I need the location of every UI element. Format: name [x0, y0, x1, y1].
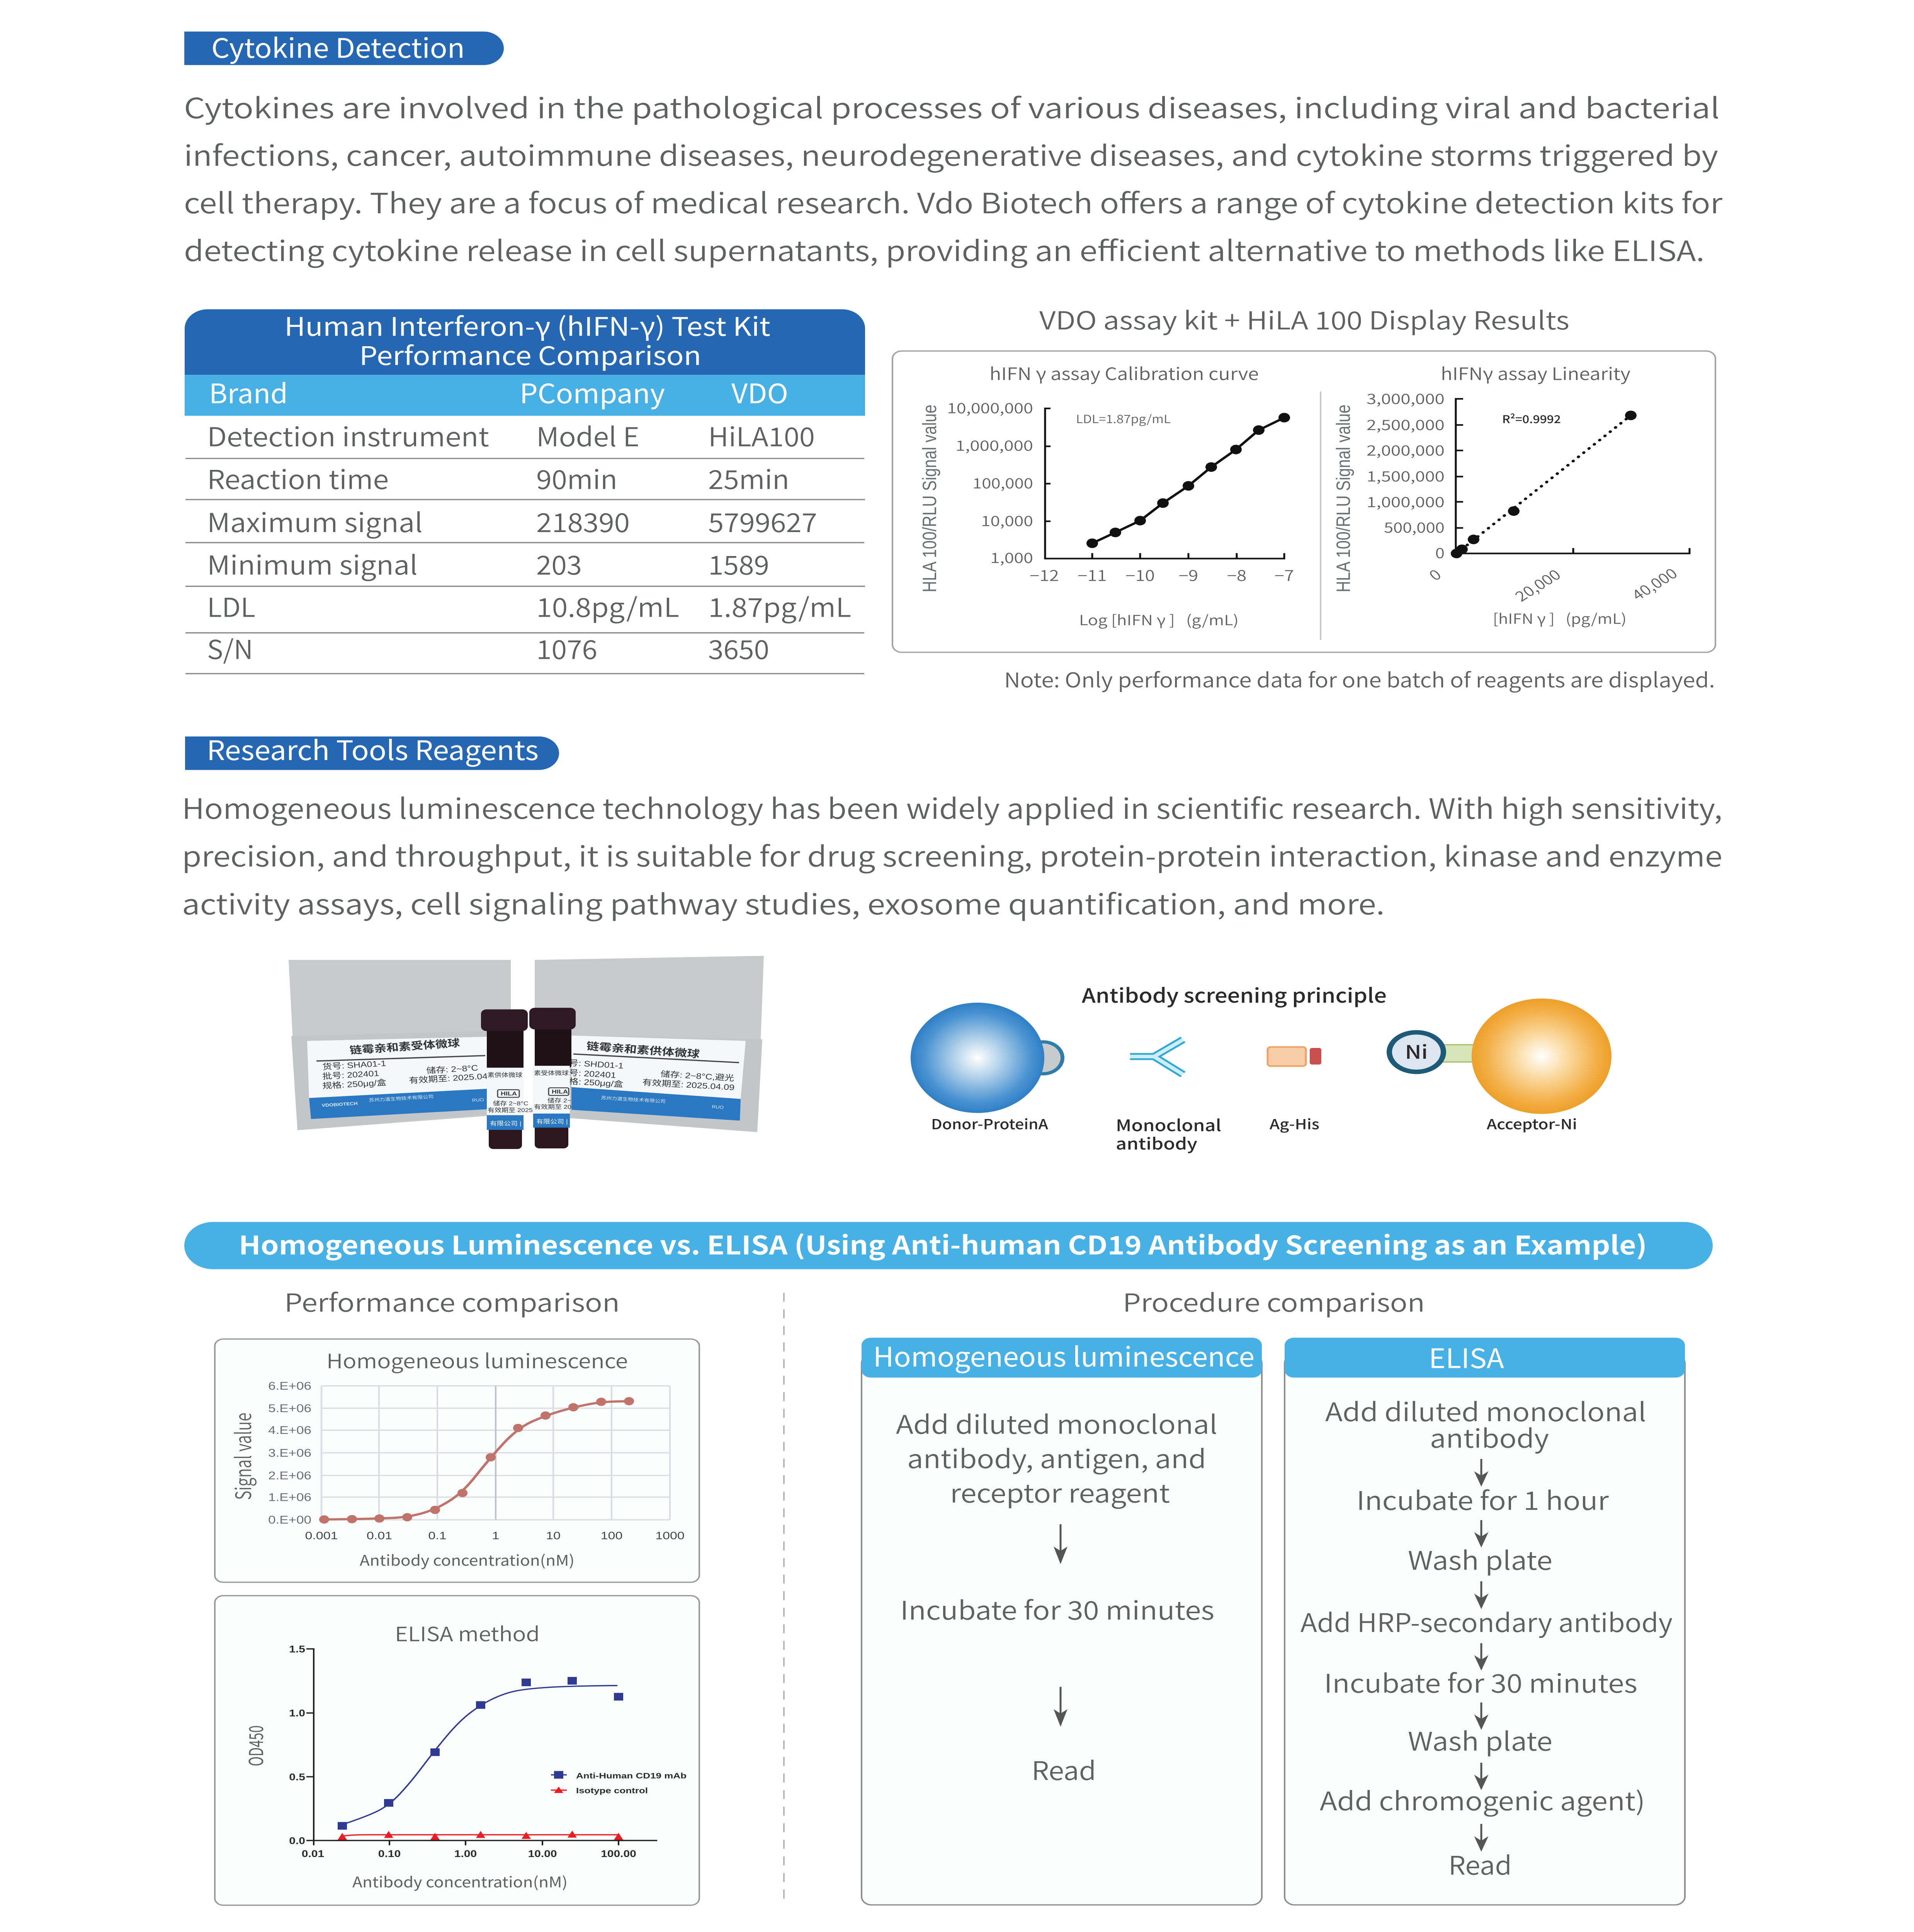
- panel: homogeneous luminescence procedure: [862, 1336, 1262, 1905]
- badge: Research Tools Reagents: Research Tools Reagents: [207, 730, 539, 768]
- panel: homogeneous luminescence chart: 0.1: [428, 1529, 447, 1542]
- icon: monoclonal antibody: [1116, 1040, 1221, 1155]
- panel: homogeneous luminescence chart: Antibody concentration(nM): [360, 1549, 575, 1570]
- chart: linearity: HLA 100/RLU Signal value: [1333, 405, 1354, 592]
- procedure steps: Incubate for 30 minutes: [900, 1590, 1214, 1627]
- chart: calibration curve: −7: [1275, 564, 1294, 585]
- panel: ELISA method chart: OD450: [241, 1725, 269, 1766]
- panel: homogeneous luminescence chart: 0.01: [367, 1529, 392, 1542]
- panel: ELISA method chart: Antibody concentration(nM): [352, 1871, 568, 1892]
- kit box left: 苏州力道生物技术有限公司: [369, 1094, 434, 1103]
- diagram title: Antibody screening principle: [1082, 980, 1387, 1009]
- procedure steps: antibody: [1430, 1418, 1549, 1456]
- procedure header: [1285, 1337, 1685, 1378]
- table column header: Brand: [209, 373, 288, 411]
- panel: homogeneous luminescence chart: 3.E+06: [268, 1447, 311, 1459]
- table body rows: 1589: [708, 544, 769, 582]
- kit box right: 有效期至: 2025.04.09: [642, 1078, 735, 1092]
- chart: calibration curve: −8: [1227, 564, 1246, 585]
- panel: homogeneous luminescence chart: 5.E+06: [268, 1402, 311, 1415]
- kit box right: RUO: [712, 1104, 724, 1110]
- table body rows: 3650: [708, 629, 769, 667]
- paragraph: homogeneous luminescence introduction: Homogeneous luminescence technology has been widely applied in scientific research. With high sensitivity,: [182, 786, 1722, 827]
- banner: homogeneous luminescence vs ELISA: Homogeneous Luminescence vs. ELISA (Using Anti-human CD19 Antibody Screening as an Example): [239, 1225, 1647, 1262]
- chart: linearity: [hIFN γ ] (pg/mL): [1493, 607, 1627, 628]
- kit box right: [535, 956, 764, 1132]
- vial left: HILA: [501, 1090, 517, 1097]
- icon: donor bead with protein A: [911, 1003, 1062, 1133]
- chart: calibration curve: 1,000,000: [955, 434, 1033, 455]
- section: research tools reagents: [182, 730, 1722, 923]
- chart: calibration curve: −11: [1078, 564, 1107, 585]
- note: reagent batch: Note: Only performance data for one batch of reagents are displayed.: [1004, 664, 1715, 693]
- kit box left: 货号: SHA01-1: [322, 1059, 386, 1071]
- chart: linearity: 1,000,000: [1367, 491, 1445, 512]
- heading: procedure comparison: Procedure comparison: [1123, 1283, 1425, 1319]
- panel: assay charts: [892, 351, 1715, 652]
- panel: homogeneous luminescence chart: 6.E+06: [268, 1379, 311, 1392]
- vial right: HILA: [552, 1088, 568, 1095]
- vial right: 有限公司 | 广: [536, 1118, 577, 1125]
- procedure steps: Incubate for 30 minutes: [1324, 1663, 1637, 1700]
- chart: calibration curve: 100,000: [972, 472, 1033, 493]
- chart: calibration curve: LDL=1.87pg/mL: [1076, 410, 1171, 427]
- kit box left: 储存: 2~8°C: [426, 1063, 478, 1075]
- panel: ELISA method chart: 0.0: [289, 1835, 305, 1846]
- kit box left: 链霉亲和素受体微球: [349, 1037, 461, 1056]
- procedure steps: [896, 1405, 1217, 1787]
- panel: homogeneous luminescence chart: Homogeneous luminescence: [326, 1346, 628, 1374]
- panel: ELISA procedure: [1285, 1337, 1685, 1905]
- panel: ELISA method chart: ELISA method: [395, 1619, 540, 1647]
- chart: linearity: 0: [1423, 564, 1446, 585]
- procedure steps: Read: [1448, 1845, 1512, 1882]
- chart: calibration curve: [919, 361, 1294, 629]
- table column header: PCompany: [520, 373, 665, 411]
- chart: calibration curve: 10,000,000: [947, 397, 1033, 417]
- chart: linearity: [1333, 361, 1690, 628]
- chart: linearity: hIFNγ assay Linearity: [1441, 361, 1630, 385]
- panel: ELISA method chart: [215, 1596, 699, 1905]
- chart: linearity: 0: [1435, 542, 1445, 563]
- kit box left: [289, 960, 511, 1130]
- procedure steps: Wash plate: [1408, 1541, 1552, 1578]
- panel: homogeneous luminescence chart: 1.E+06: [268, 1491, 311, 1503]
- procedure steps: Add HRP-secondary antibody: [1300, 1603, 1673, 1639]
- kit box right: 货号: SHD01-1: [559, 1058, 624, 1070]
- paragraph: homogeneous luminescence introduction: activity assays, cell signaling pathway studies, exosome quantification, and more.: [182, 882, 1385, 923]
- vial left: 有限公司 | 广: [490, 1120, 530, 1127]
- table body rows: 10.8pg/mL: [536, 587, 679, 624]
- vial left: 有效期至 2025: [488, 1107, 533, 1113]
- chart: calibration curve: hIFN γ assay Calibration curve: [989, 361, 1259, 385]
- vial right: 素受体微球: [534, 1070, 569, 1077]
- chart: calibration curve: HLA 100/RLU Signal value: [919, 405, 940, 592]
- paragraph: cytokine introduction: cell therapy. They are a focus of medical research. Vdo Biotech offers a range of cytokine detection kits for: [184, 181, 1722, 222]
- chart: linearity: 3,000,000: [1367, 388, 1445, 408]
- chart: calibration curve: Log [hIFN γ ] (g/mL): [1079, 609, 1239, 629]
- kit box left: RUO: [472, 1097, 484, 1103]
- legend: [551, 1771, 687, 1795]
- chart: linearity: 500,000: [1384, 516, 1445, 537]
- icon: donor bead with protein A: Donor-ProteinA: [931, 1113, 1049, 1133]
- chart: linearity: 2,000,000: [1367, 439, 1445, 460]
- kit box left: 规格: 250μg/盒: [322, 1078, 387, 1090]
- panel: homogeneous luminescence chart: 10: [546, 1529, 561, 1542]
- icon: acceptor bead with Ni: [1389, 998, 1611, 1133]
- panel: homogeneous luminescence chart: 0.E+00: [268, 1514, 311, 1526]
- chart: linearity: 40,000: [1626, 563, 1682, 604]
- panel: ELISA method chart: 100.00: [601, 1849, 636, 1859]
- paragraph: cytokine introduction: detecting cytokine release in cell supernatants, providing an efficient alternative to methods like ELISA.: [184, 229, 1705, 269]
- paragraph: cytokine introduction: Cytokines are involved in the pathological processes of various diseases, including viral and bacterial: [184, 86, 1720, 127]
- panel: homogeneous luminescence chart: Signal value: [226, 1413, 257, 1500]
- table body rows: [207, 416, 851, 667]
- panel: ELISA method chart: 0.5: [289, 1772, 305, 1782]
- panel: ELISA method chart: 1.0: [289, 1708, 305, 1719]
- procedure steps: Incubate for 1 hour: [1356, 1481, 1609, 1517]
- arrow: [1056, 1687, 1066, 1724]
- procedure steps: [1300, 1392, 1673, 1882]
- arrow: [1056, 1524, 1066, 1561]
- table column header: VDO: [731, 373, 788, 411]
- panel: ELISA method chart: 0.10: [378, 1849, 401, 1859]
- paragraph: cytokine introduction: [184, 86, 1722, 269]
- panel: homogeneous luminescence chart: 1: [492, 1529, 499, 1542]
- chart: calibration curve: −12: [1030, 564, 1059, 585]
- table body rows: Detection instrument: [207, 416, 489, 454]
- icon: Ag-His: [1268, 1047, 1321, 1133]
- legend: Anti-Human CD19 mAb: [576, 1771, 687, 1780]
- kit box right: 苏州力道生物技术有限公司: [601, 1095, 666, 1104]
- vial left: 素供体微球: [488, 1072, 523, 1078]
- procedure steps: receptor reagent: [950, 1473, 1170, 1510]
- icon: monoclonal antibody: Monoclonal: [1116, 1113, 1221, 1136]
- panel: homogeneous luminescence chart: 1000: [655, 1529, 685, 1542]
- arrows between steps: [1476, 1459, 1486, 1849]
- table body rows: 25min: [708, 459, 789, 497]
- chart: calibration curve: 10,000: [981, 510, 1033, 530]
- panel: homogeneous luminescence chart: 100: [601, 1529, 622, 1542]
- vial left: 储存 2~8°C: [493, 1100, 529, 1107]
- procedure steps: Wash plate: [1408, 1721, 1552, 1758]
- table body rows: 218390: [536, 502, 630, 540]
- kit box right: 链霉亲和素供体微球: [586, 1041, 700, 1060]
- panel: homogeneous luminescence chart: 0.001: [305, 1529, 338, 1542]
- chart: linearity: 2,500,000: [1367, 414, 1445, 434]
- kit box right: 规格: 250μg/盒: [559, 1076, 624, 1089]
- procedure steps: Add diluted monoclonal: [1325, 1392, 1646, 1429]
- legend: Isotype control: [576, 1786, 648, 1795]
- panel: homogeneous luminescence chart: 2.E+06: [268, 1469, 311, 1482]
- panel: homogeneous luminescence chart: 4.E+06: [268, 1424, 311, 1437]
- chart: calibration curve: −9: [1179, 564, 1198, 585]
- icon: monoclonal antibody: antibody: [1116, 1131, 1197, 1155]
- table body rows: Model E: [536, 416, 639, 454]
- diagram: antibody screening principle: [911, 980, 1611, 1155]
- heading: VDO assay kit results: VDO assay kit + HiLA 100 Display Results: [1039, 301, 1569, 337]
- procedure steps: Add chromogenic agent): [1320, 1781, 1645, 1818]
- vial right: 储存 2~: [547, 1097, 571, 1104]
- paragraph: cytokine introduction: infections, cancer, autoimmune diseases, neurodegenerative diseases, and cytokine storms triggered by: [184, 133, 1718, 174]
- table body rows: Maximum signal: [207, 502, 423, 540]
- photo: reagent kit boxes and vials: [289, 956, 764, 1149]
- table body rows: 203: [536, 544, 582, 582]
- table body rows: HiLA100: [708, 416, 815, 454]
- vial left: [481, 1009, 533, 1149]
- panel: ELISA method chart: 1.00: [454, 1849, 477, 1859]
- table: hIFN-gamma test kit performance comparison: [185, 306, 865, 673]
- chart: calibration curve: −10: [1125, 564, 1155, 585]
- panel: ELISA method chart: 10.00: [528, 1849, 557, 1859]
- procedure header: Homogeneous luminescence: [873, 1336, 1254, 1374]
- chart: linearity: 1,500,000: [1367, 465, 1445, 486]
- chart: linearity: R²=0.9992: [1502, 410, 1561, 426]
- panel: homogeneous luminescence chart: [215, 1339, 699, 1582]
- table title bar: Human Interferon-γ (hIFN-γ) Test Kit: [284, 306, 770, 344]
- table body rows: LDL: [207, 587, 255, 624]
- procedure steps: Read: [1032, 1751, 1096, 1787]
- heading: performance comparison: Performance comparison: [284, 1283, 620, 1319]
- icon: Ag-His: Ag-His: [1270, 1113, 1319, 1133]
- kit box right: 储存: 2~8°C,避光: [660, 1069, 734, 1083]
- procedure steps: antibody, antigen, and: [907, 1439, 1206, 1476]
- table body rows: 1076: [536, 629, 597, 667]
- chart: calibration curve: 1,000: [990, 547, 1033, 567]
- procedure header: ELISA: [1429, 1337, 1504, 1376]
- procedure steps: Add diluted monoclonal: [896, 1405, 1217, 1441]
- table body rows: S/N: [207, 629, 253, 667]
- panel: ELISA method chart: 1.5: [289, 1644, 305, 1655]
- paragraph: homogeneous luminescence introduction: precision, and throughput, it is suitable for drug screening, protein-protein interaction, kinase and enzyme: [182, 834, 1722, 875]
- icon: acceptor bead with Ni: Ni: [1405, 1037, 1428, 1064]
- kit box left: 有效期至: 2025.04.09: [408, 1071, 501, 1085]
- paragraph: homogeneous luminescence introduction: [182, 786, 1722, 923]
- table body rows: 5799627: [708, 502, 817, 540]
- table body rows: Minimum signal: [207, 544, 418, 582]
- kit box left: VDOBIOTECH: [321, 1101, 358, 1108]
- table body rows: 90min: [536, 459, 617, 497]
- chart: linearity: 20,000: [1509, 564, 1565, 605]
- icon: acceptor bead with Ni: Acceptor-Ni: [1487, 1113, 1577, 1133]
- section: cytokine detection: [184, 27, 1722, 269]
- kit box right: 批号: 202401: [559, 1067, 616, 1080]
- panel: ELISA method chart: 0.01: [302, 1849, 324, 1859]
- table column header: [185, 373, 865, 416]
- table title bar: [185, 306, 865, 375]
- table body rows: 1.87pg/mL: [708, 587, 851, 624]
- kit box left: 批号: 202401: [322, 1069, 379, 1081]
- badge: Cytokine Detection: Cytokine Detection: [211, 27, 465, 66]
- table title bar: Performance Comparison: [359, 336, 701, 373]
- vial right: 有效期至 20: [534, 1104, 571, 1110]
- vial right: [529, 1008, 577, 1148]
- table body rows: Reaction time: [207, 459, 389, 497]
